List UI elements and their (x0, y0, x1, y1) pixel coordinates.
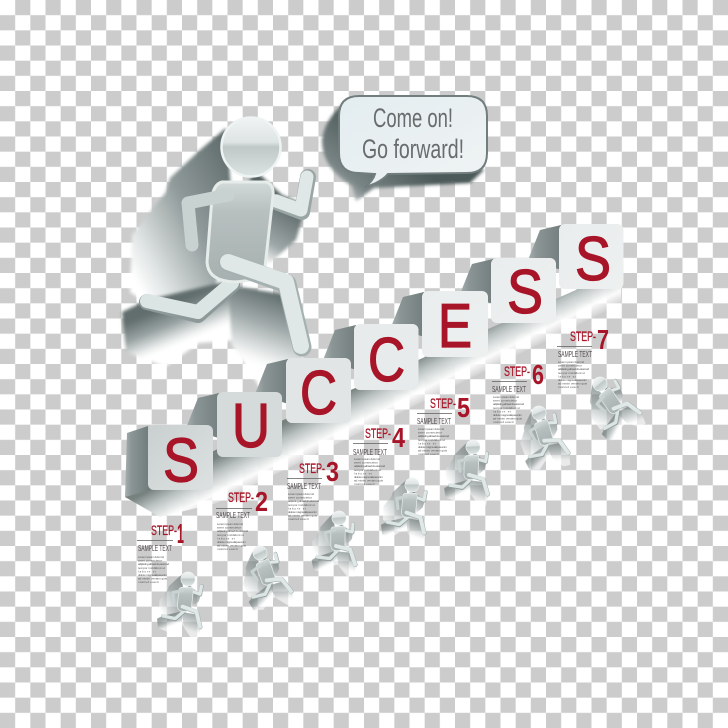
step 7 text block: STEP- (570, 328, 596, 344)
step 2 text block: tempor incididunt ut (217, 533, 244, 537)
step 2 text block: SAMPLE TEXT (216, 511, 250, 520)
step 3 text block: adipiscing elit sed do eiusmod (288, 499, 319, 503)
step 6 text block: Lorem ipsum dolor sit (493, 395, 519, 399)
step 4 text block: tempor incididunt ut (354, 468, 381, 472)
runner 3 (308, 510, 358, 580)
block: C second: C (368, 326, 405, 395)
step 3 text block: labore et (288, 506, 306, 510)
block side faces (125, 225, 565, 497)
step 2 text block: ad minim veniam quis (217, 544, 246, 548)
big runner figure (147, 118, 308, 347)
block: C: C (300, 359, 337, 428)
step 1 text block: nostrud exerci (138, 580, 159, 584)
step 5 text block: nostrud exerci (418, 452, 439, 456)
block: S second: S (507, 258, 543, 327)
step 2 text block: dolore magna aliqua enim (217, 540, 246, 544)
step 2 text block: amet consectetur (217, 526, 241, 530)
step 4 text block: labore et (354, 471, 372, 475)
block: U (217, 392, 282, 461)
step 1 text block: ad minim veniam quis (138, 577, 168, 581)
block: U: U (232, 392, 270, 461)
runner 1 (157, 572, 202, 639)
step 1 text block: Lorem ipsum dolor sit (138, 555, 164, 559)
step 5 text block: 5 (457, 392, 470, 423)
step 5 text block: STEP- (430, 395, 456, 411)
speech bubble: Come on! (373, 103, 453, 133)
step 5 text block: dolore magna aliqua enim (418, 445, 448, 449)
step 5 text block: SAMPLE TEXT (417, 417, 451, 426)
text: 1 (177, 518, 184, 549)
step 6 text block: amet consectetur (493, 399, 517, 403)
step 4 text block: 4 (392, 422, 405, 453)
step 3 text block: STEP- (299, 460, 325, 476)
step 2 text block: Lorem ipsum dolor sit (217, 522, 243, 526)
block: E (422, 291, 488, 361)
block: S (148, 425, 213, 496)
step 4 text block: dolore magna aliqua enim (354, 475, 384, 479)
block: C (286, 358, 351, 428)
runner 7 (572, 370, 649, 450)
runner 6 (508, 401, 574, 480)
shadow under staircase blocks (125, 270, 621, 517)
step 3 text block: tempor incididunt ut (288, 503, 315, 507)
step 3 text block: ad minim veniam quis (288, 514, 318, 518)
step 1 text block: tempor incididunt ut (138, 566, 165, 570)
step 2 text block: 2 (255, 486, 268, 517)
step 5 text block: labore et (418, 441, 436, 445)
step 2 text block (216, 486, 268, 551)
step 4 text block: STEP- (365, 425, 391, 441)
step 3 text block: 3 (326, 456, 339, 487)
step 5 text block: amet consectetur (418, 431, 442, 435)
step 1 text block: SAMPLE TEXT (138, 544, 172, 553)
step 5 text block: Lorem ipsum dolor sit (418, 427, 444, 431)
step 4 text block (353, 422, 405, 486)
step 7 text block: labore et (558, 374, 576, 378)
step 3 text block: SAMPLE TEXT (287, 482, 321, 491)
block: S third (559, 224, 624, 294)
step 3 text block: Lorem ipsum dolor sit (288, 492, 314, 496)
step 6 text block: ad minim veniam quis (493, 417, 522, 421)
step 6 text block: nostrud exerci (493, 420, 514, 424)
step 2 text block: STEP- (228, 489, 254, 505)
step 6 text block: STEP- (504, 363, 530, 379)
step 3 text block: amet consectetur (288, 496, 312, 500)
runner 4 (381, 478, 426, 545)
step 7 text block: Lorem ipsum dolor sit (558, 360, 584, 364)
block: S: S (163, 426, 199, 496)
step 4 text block: adipiscing elit sed do eiusmod (354, 464, 385, 468)
step 3 text block: dolore magna aliqua enim (288, 510, 318, 514)
speech bubble (322, 96, 487, 201)
step 1 text block: labore et (138, 569, 156, 573)
step 7 text block: amet consectetur (558, 364, 582, 368)
step 4 text block: nostrud exerci (354, 482, 375, 486)
step 4 text block: ad minim veniam quis (354, 479, 384, 483)
step 7 text block: nostrud exerci (558, 385, 579, 389)
step 6 text block: labore et (493, 409, 511, 413)
step 6 text block: 6 (532, 359, 544, 390)
step 7 text block: SAMPLE TEXT (558, 350, 592, 359)
step 7 text block: dolore magna aliqua enim (558, 378, 588, 382)
step 6 text block: dolore magna aliqua enim (493, 413, 522, 417)
step 1 text block (137, 518, 184, 584)
step 2 text block: nostrud exerci (217, 547, 238, 551)
step 7 text block: 7 (597, 324, 609, 355)
step 1 text block: amet consectetur (138, 559, 162, 563)
step 5 text block: tempor incididunt ut (418, 438, 445, 442)
step 3 text block: nostrud exerci (288, 517, 309, 521)
step 4 text block: amet consectetur (354, 461, 378, 465)
step 4 text block: SAMPLE TEXT (353, 448, 387, 457)
step 6 text block (492, 359, 544, 424)
step 6 text block: tempor incididunt ut (493, 406, 520, 410)
step 7 text block: adipiscing elit sed do eiusmod (558, 367, 589, 371)
step 2 text block: adipiscing elit sed do eiusmod (217, 529, 248, 533)
step 7 text block (557, 324, 609, 389)
speech bubble: Go forward! (362, 134, 464, 164)
step 5 text block: adipiscing elit sed do eiusmod (418, 434, 449, 438)
block: C second (354, 324, 418, 395)
step 5 text block (417, 392, 470, 456)
step 7 text block: tempor incididunt ut (558, 371, 585, 375)
step 6 text block: adipiscing elit sed do eiusmod (493, 402, 524, 406)
block: S third: S (575, 225, 611, 294)
step 5 text block: ad minim veniam quis (418, 449, 448, 453)
runner 5 (442, 439, 490, 508)
step 6 text block: SAMPLE TEXT (492, 385, 526, 394)
step 4 text block: Lorem ipsum dolor sit (354, 457, 380, 461)
big runner shadow (122, 128, 306, 396)
step 1 text block: STEP- (151, 522, 177, 538)
block: S second (491, 258, 556, 327)
step 3 text block (287, 456, 339, 521)
step 7 text block: ad minim veniam quis (558, 382, 588, 386)
step 1 text block: dolore magna aliqua enim (138, 573, 168, 577)
step 1 text block: adipiscing elit sed do eiusmod (138, 562, 169, 566)
block: E: E (438, 292, 472, 361)
step 2 text block: labore et (217, 536, 235, 540)
runner 2 (229, 541, 298, 620)
